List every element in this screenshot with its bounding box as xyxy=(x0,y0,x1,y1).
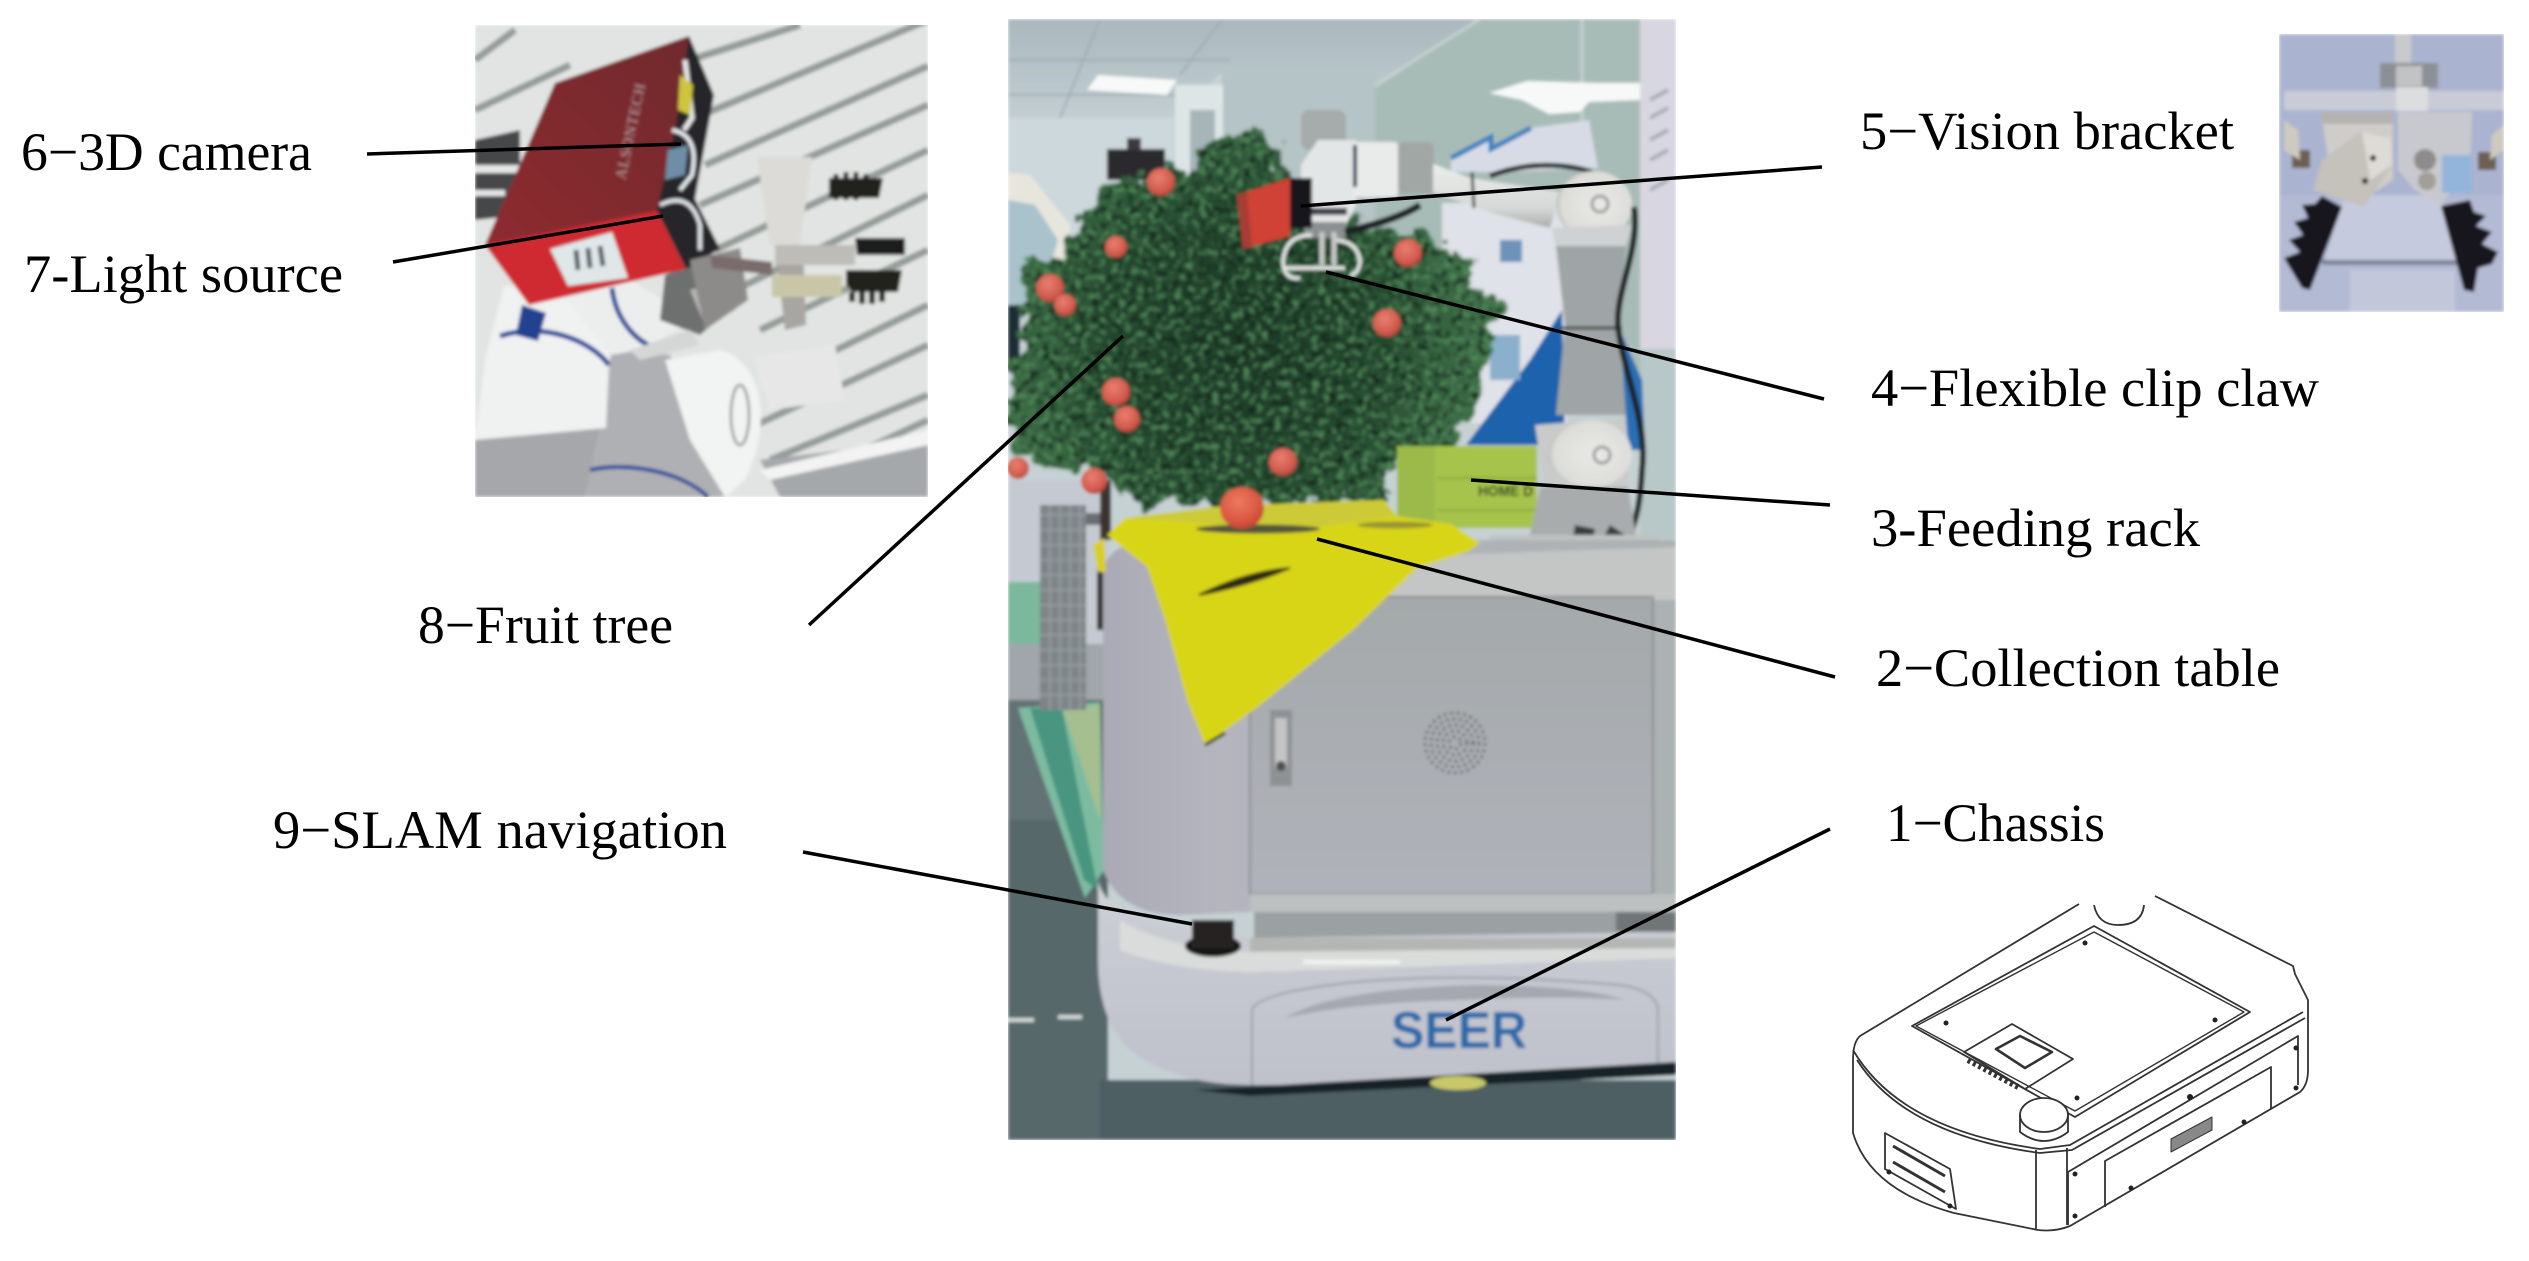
white box behind arm xyxy=(1442,203,1567,423)
arm horizontal joint xyxy=(1353,142,1398,197)
leader line: 7 light source xyxy=(393,216,663,262)
fruit tree trunk xyxy=(1100,480,1111,540)
arm: grey lower elements xyxy=(585,350,725,497)
side inner panel xyxy=(2105,1067,2271,1207)
label: 9 SLAM navigation: 9−SLAM navigation xyxy=(273,800,727,860)
leader line: 2 collection table xyxy=(1317,539,1835,677)
blue tarp xyxy=(1466,310,1565,445)
chassis top panel xyxy=(1912,926,2250,1117)
floor dash markings xyxy=(1008,1017,1082,1020)
dark mount behind camera xyxy=(475,130,520,220)
SLAM lidar xyxy=(1185,920,1241,957)
gripper fingers black combs xyxy=(829,178,883,198)
box top blue white xyxy=(1451,120,1598,172)
chassis line drawing xyxy=(1853,896,2308,1230)
cable on forearm xyxy=(1345,205,1420,232)
leader line: 5 vision bracket xyxy=(1301,167,1822,206)
poster right xyxy=(1640,19,1676,349)
strap above forearm xyxy=(1490,165,1592,176)
label: 7 light source: 7-Light source xyxy=(24,244,343,304)
arm shoulder white xyxy=(1300,140,1356,225)
side brand plate xyxy=(2171,1117,2212,1152)
lower background xyxy=(1008,480,1108,710)
room background xyxy=(1008,72,1676,1080)
chassis upper edge xyxy=(1853,1012,2305,1153)
gripper plate xyxy=(757,157,812,245)
flange xyxy=(658,264,708,336)
label: 1 chassis: 1−Chassis xyxy=(1886,793,2105,853)
slat wall stripes xyxy=(475,20,928,480)
leader line: 6 3D camera xyxy=(367,144,681,154)
window strip left xyxy=(1008,172,1071,262)
label: 6 3D camera: 6−3D camera xyxy=(21,122,312,182)
wall background xyxy=(475,25,928,497)
label: 2 collection table: 2−Collection table xyxy=(1876,638,2280,698)
cabinet door xyxy=(1250,597,1653,894)
door handle xyxy=(1270,710,1292,786)
door speaker grille xyxy=(1425,713,1485,773)
SEER logo: SEER xyxy=(1391,1002,1527,1060)
panel: flexible gripper close-up photo xyxy=(2279,34,2504,312)
upper link white xyxy=(1552,225,1632,248)
wrist metal xyxy=(690,248,748,330)
leader line: 8 fruit tree xyxy=(809,336,1123,625)
chassis panel outline xyxy=(1252,978,1658,1085)
front vent xyxy=(1885,1133,1956,1209)
arm: white wrist xyxy=(572,282,677,356)
ceiling xyxy=(1008,19,1475,100)
cabinet top surface xyxy=(1350,547,1676,600)
grey ceiling corner xyxy=(760,440,928,497)
control screen xyxy=(1964,1024,2073,1089)
left bracket xyxy=(2321,112,2393,198)
right black finger xyxy=(2441,200,2498,292)
chassis outer outline xyxy=(1853,896,2308,1230)
panel: main robot photo xyxy=(1007,19,1676,1140)
leader line: 1 chassis xyxy=(1446,829,1830,1020)
label: 5 vision bracket: 5−Vision bracket xyxy=(1860,101,2234,161)
camera lens side xyxy=(657,36,720,269)
leader line: 3 feeding rack xyxy=(1471,480,1830,505)
right bracket xyxy=(2398,112,2472,205)
leader line: 4 flexible clip claw xyxy=(1326,272,1824,399)
left wall xyxy=(1008,118,1173,318)
yellow cloth xyxy=(1093,500,1480,745)
forearm xyxy=(1433,164,1560,228)
underside shadow and wheel xyxy=(1195,1062,1676,1096)
gripper shaft xyxy=(2395,34,2411,64)
feeding rack box xyxy=(1397,446,1537,528)
green conveyor strip xyxy=(1018,702,1104,898)
screws xyxy=(1886,940,2298,1218)
white cylinder disk xyxy=(665,350,761,497)
glass wall right xyxy=(1375,19,1640,400)
lidar knob back xyxy=(2094,905,2144,925)
ceiling light right xyxy=(1489,81,1640,114)
arm base xyxy=(1530,487,1636,535)
corner vertical lines xyxy=(2036,1148,2067,1230)
apple on table xyxy=(1220,487,1264,529)
crossbar xyxy=(2284,91,2504,110)
cabinet lower lip xyxy=(1250,894,1676,912)
floor xyxy=(1008,700,1108,1140)
label: 3 feeding rack: 3-Feeding rack xyxy=(1871,498,2200,558)
gripper nut xyxy=(2380,63,2438,88)
3D camera red top xyxy=(485,36,701,245)
elbow joint xyxy=(1556,171,1632,239)
apples on tree xyxy=(1007,168,1422,494)
cloth slits xyxy=(1196,524,1320,534)
ceiling light left xyxy=(1087,75,1177,95)
label: 4 flexible clip claw: 4−Flexible clip claw xyxy=(1871,358,2319,418)
lidar knob front xyxy=(2020,1098,2068,1132)
chassis base xyxy=(1098,880,1676,1096)
feeding rack box: HOME D xyxy=(1478,483,1533,500)
lower joint xyxy=(1535,418,1628,490)
arm top grey cylinder xyxy=(1301,110,1346,150)
side outer panel xyxy=(2068,1036,2298,1225)
panel: 3D camera close-up photo xyxy=(475,20,928,497)
backdrop xyxy=(2279,34,2504,312)
robot arm xyxy=(1300,110,1660,550)
wall speaker xyxy=(1107,149,1165,180)
gap below cabinet xyxy=(1254,912,1616,938)
barcode label xyxy=(550,232,628,286)
3D camera front red face xyxy=(485,211,686,305)
leader line: 9 SLAM navigation xyxy=(803,852,1192,924)
left black finger xyxy=(2284,196,2342,290)
flexible gripper xyxy=(1283,232,1360,278)
fruit tree foliage xyxy=(1009,129,1500,506)
grey link xyxy=(1556,246,1626,415)
camera brand text: ALSONTECH xyxy=(613,81,649,181)
back wall middle xyxy=(1222,70,1376,229)
wire mesh rack xyxy=(1040,505,1086,710)
main arm cable xyxy=(1618,207,1643,550)
arm blue rings xyxy=(500,331,609,365)
side pivots xyxy=(2292,150,2310,168)
label: 8 fruit tree: 8−Fruit tree xyxy=(418,595,673,655)
cabinet body xyxy=(1103,540,1676,915)
3D camera on arm xyxy=(1237,178,1312,249)
left jaw xyxy=(2313,132,2392,207)
